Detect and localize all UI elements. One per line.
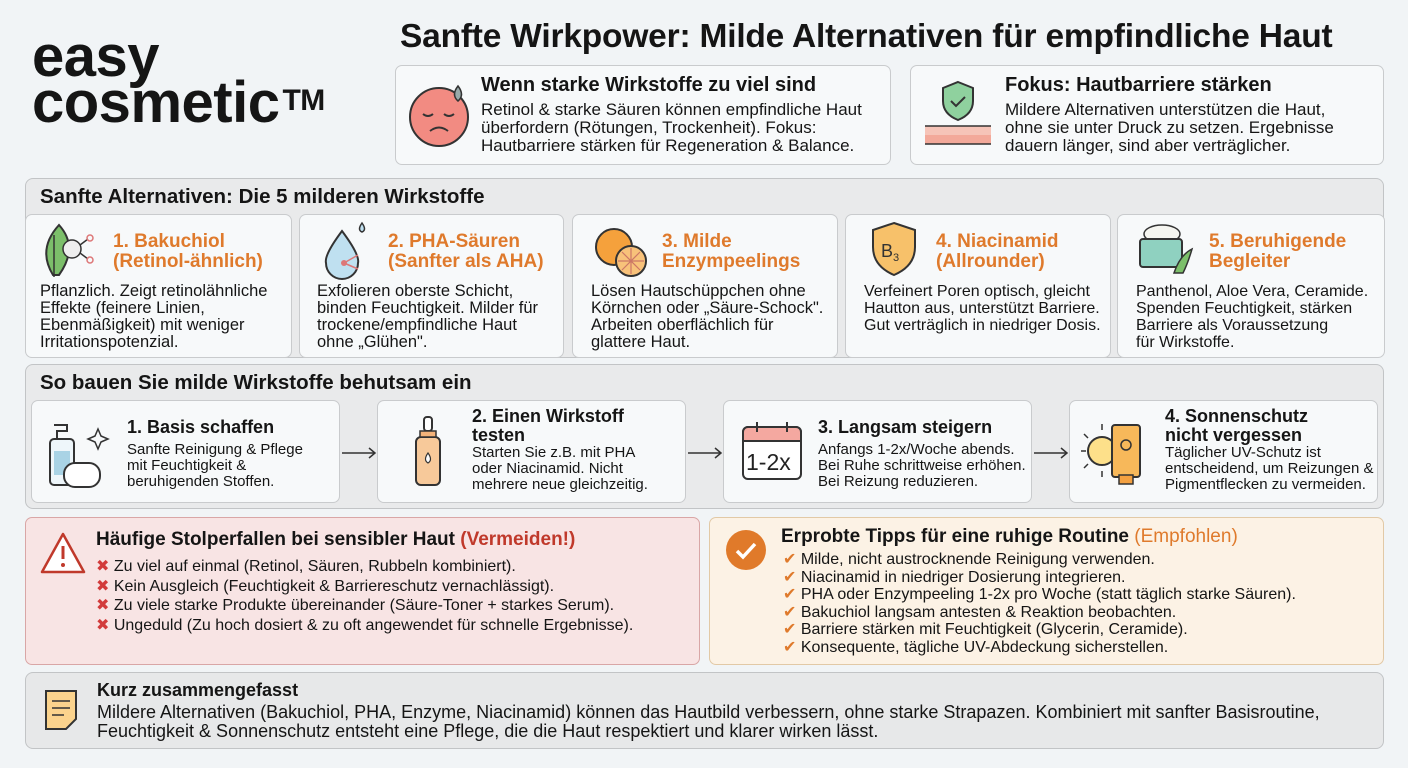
- step 4: entscheidend, um Reizungen &: [1165, 460, 1373, 477]
- card 1: Irritationspotenzial.: [40, 333, 178, 351]
- step 3: [723, 400, 1032, 503]
- card 4: Gut verträglich in niedriger Dosis.: [864, 317, 1101, 334]
- step 2: [377, 400, 686, 503]
- panel: stolperfallen: Häufige Stolperfallen bei sensibler Haut (Vermeiden!): [96, 529, 575, 550]
- icon: irritated face: [409, 84, 469, 147]
- box: wenn starke Wirkstoffe: überfordern (Rötungen, Trockenheit). Fokus:: [481, 118, 816, 137]
- panel: so bauen Sie ein: [25, 364, 1384, 509]
- card 5: 5. Beruhigende: [1209, 231, 1346, 252]
- icon: sun and sunscreen: [1081, 424, 1141, 485]
- step 1: mit Feuchtigkeit &: [127, 457, 246, 474]
- step 2: 2. Einen Wirkstoff: [472, 406, 624, 426]
- icon: note: [45, 690, 77, 730]
- card 3: 3. Milde: [662, 231, 732, 252]
- step 3: 3. Langsam steigern: [818, 417, 992, 437]
- card 4: [845, 214, 1111, 358]
- arrow 1: [342, 448, 376, 458]
- box: wenn starke Wirkstoffe: Retinol & starke Säuren können empfindliche Haut: [481, 100, 862, 119]
- card 3: Arbeiten oberflächlich für: [591, 316, 774, 334]
- icon: dropper bottle: [415, 416, 441, 486]
- list: tips: [783, 551, 1296, 656]
- card 3: [572, 214, 838, 358]
- logo: [32, 24, 325, 135]
- card 4: Hautton aus, unterstützt Barriere.: [864, 300, 1100, 317]
- card 5: für Wirkstoffe.: [1136, 334, 1234, 351]
- panel: 5 mildere Wirkstoffe: [25, 178, 1384, 358]
- card 2: ohne „Glühen".: [317, 333, 427, 351]
- card 4: (Allrounder): [936, 251, 1045, 272]
- box: hautbarriere: Fokus: Hautbarriere stärken: [1005, 74, 1272, 96]
- card 1: Effekte (feinere Linien,: [40, 299, 205, 317]
- icon: B3 shield: 3: [893, 252, 899, 264]
- step 4: 4. Sonnenschutz: [1165, 406, 1308, 426]
- list: avoid: ✖ Kein Ausgleich (Feuchtigkeit & Barriereschutz vernachlässigt).: [96, 578, 554, 594]
- step 1: beruhigenden Stoffen.: [127, 473, 274, 490]
- step 2: mehrere neue gleichzeitig.: [472, 476, 648, 493]
- list: tips: ✔ Konsequente, tägliche UV-Abdeckung sicherstellen.: [783, 638, 1168, 656]
- icon: leaf: [45, 224, 94, 277]
- box: hautbarriere: Mildere Alternativen unterstützen die Haut,: [1005, 100, 1325, 119]
- arrow 2: [688, 448, 722, 458]
- heading: So bauen Sie milde Wirkstoffe behutsam ein: [40, 371, 472, 394]
- panel: tipps: Erprobte Tipps für eine ruhige Routine (Empfohlen): [781, 526, 1238, 547]
- panel: summary: Mildere Alternativen (Bakuchiol, PHA, Enzyme, Niacinamid) können das Hautbild verbessern, ohne starke Strapazen. Kombiniert mit sanfter Basisroutine,: [97, 702, 1320, 722]
- heading: Sanfte Alternativen: Die 5 milderen Wirkstoffe: [40, 185, 484, 208]
- logo: easy: [32, 24, 159, 89]
- list: tips: ✔ Niacinamid in niedriger Dosierung integrieren.: [783, 568, 1125, 586]
- card 1: 1. Bakuchiol: [113, 231, 225, 252]
- step 3: Bei Reizung reduzieren.: [818, 473, 978, 490]
- box: hautbarriere: [910, 65, 1384, 165]
- card 3: Körnchen oder „Säure-Schock".: [591, 299, 823, 317]
- list: tips: ✔ Milde, nicht austrocknende Reinigung verwenden.: [783, 551, 1155, 568]
- panel: summary: Feuchtigkeit & Sonnenschutz entsteht eine Pflege, die die Haut respektiert und klarer wirken lässt.: [97, 721, 878, 741]
- icon: calendar 1-2x: [742, 422, 802, 480]
- panel: stolperfallen: [25, 517, 700, 665]
- step 2: testen: [472, 425, 525, 445]
- card 1: Ebenmäßigkeit) mit weniger: [40, 316, 244, 334]
- card 5: Begleiter: [1209, 251, 1290, 272]
- step 2: Starten Sie z.B. mit PHA: [472, 444, 635, 461]
- list: avoid: ✖ Ungeduld (Zu hoch dosiert & zu oft angewendet für schnelle Ergebnisse).: [96, 616, 633, 634]
- icon: calendar 1-2x: 1-2x: [746, 449, 791, 475]
- list: tips: ✔ Barriere stärken mit Feuchtigkeit (Glycerin, Ceramide).: [783, 621, 1188, 638]
- step 3: Bei Ruhe schrittweise erhöhen.: [818, 457, 1026, 474]
- icon: B3 shield: B: [881, 241, 893, 261]
- icon: check circle: [726, 530, 766, 570]
- box: hautbarriere: ohne sie unter Druck zu setzen. Ergebnisse: [1005, 118, 1334, 137]
- icon: warning: [40, 532, 86, 574]
- step 4: Täglicher UV-Schutz ist: [1165, 444, 1321, 461]
- arrow 3: [1034, 448, 1068, 458]
- card 2: [299, 214, 564, 358]
- list: tips: ✔ PHA oder Enzympeeling 1-2x pro Woche (statt täglich starke Säuren).: [783, 586, 1296, 603]
- list: avoid: [96, 558, 633, 634]
- step 3: Anfangs 1-2x/Woche abends.: [818, 441, 1015, 458]
- card 4: Verfeinert Poren optisch, gleicht: [864, 283, 1090, 300]
- icon: cream jar: [1139, 224, 1194, 274]
- card 4: 4. Niacinamid: [936, 231, 1058, 252]
- step 1: Sanfte Reinigung & Pflege: [127, 441, 303, 458]
- step 2: oder Niacinamid. Nicht: [472, 460, 623, 477]
- icon: bottle and towel: [49, 424, 110, 488]
- list: avoid: ✖ Zu viel auf einmal (Retinol, Säuren, Rubbeln kombiniert).: [96, 558, 516, 575]
- icon: drop: [324, 222, 366, 280]
- icon: B3 shield: [872, 222, 916, 276]
- card 5: Panthenol, Aloe Vera, Ceramide.: [1136, 283, 1368, 300]
- step 4: nicht vergessen: [1165, 425, 1302, 445]
- step 4: Pigmentflecken zu vermeiden.: [1165, 476, 1366, 493]
- step 1: 1. Basis schaffen: [127, 417, 274, 437]
- box: wenn starke Wirkstoffe: Wenn starke Wirkstoffe zu viel sind: [481, 74, 816, 96]
- title: Sanfte Wirkpower: Milde Alternativen für empfindliche Haut: [400, 18, 1332, 55]
- box: hautbarriere: dauern länger, sind aber verträglicher.: [1005, 136, 1290, 155]
- panel: tipps: [709, 517, 1384, 665]
- list: avoid: ✖ Zu viele starke Produkte übereinander (Säure-Toner + starkes Serum).: [96, 597, 614, 614]
- card 2: (Sanfter als AHA): [388, 251, 544, 272]
- card 2: 2. PHA-Säuren: [388, 231, 520, 252]
- box: wenn starke Wirkstoffe: Hautbarriere stärken für Regeneration & Balance.: [481, 136, 854, 155]
- list: tips: ✔ Bakuchiol langsam antesten & Reaktion beobachten.: [783, 604, 1176, 620]
- panel: summary: [25, 672, 1384, 749]
- card 2: Exfolieren oberste Schicht,: [317, 282, 513, 300]
- step 1: [31, 400, 340, 503]
- card 5: Spenden Feuchtigkeit, stärken: [1136, 300, 1352, 317]
- card 2: trockene/empfindliche Haut: [317, 316, 517, 334]
- card 3: Lösen Hautschüppchen ohne: [591, 282, 806, 300]
- icon: shield skin: [925, 80, 991, 145]
- card 3: glattere Haut.: [591, 333, 690, 351]
- panel: summary: Kurz zusammengefasst: [97, 680, 298, 700]
- step 4: [1069, 400, 1378, 503]
- card 3: Enzympeelings: [662, 251, 800, 272]
- card 1: Pflanzlich. Zeigt retinolähnliche: [40, 282, 267, 300]
- card 2: binden Feuchtigkeit. Milder für: [317, 299, 538, 317]
- card 1: [25, 214, 292, 358]
- card 5: [1117, 214, 1385, 358]
- card 1: (Retinol-ähnlich): [113, 251, 263, 272]
- card 5: Barriere als Voraussetzung: [1136, 317, 1328, 334]
- logo: cosmeticTM: [32, 70, 325, 135]
- icon: orange: [595, 228, 647, 277]
- box: wenn starke Wirkstoffe: [395, 65, 891, 165]
